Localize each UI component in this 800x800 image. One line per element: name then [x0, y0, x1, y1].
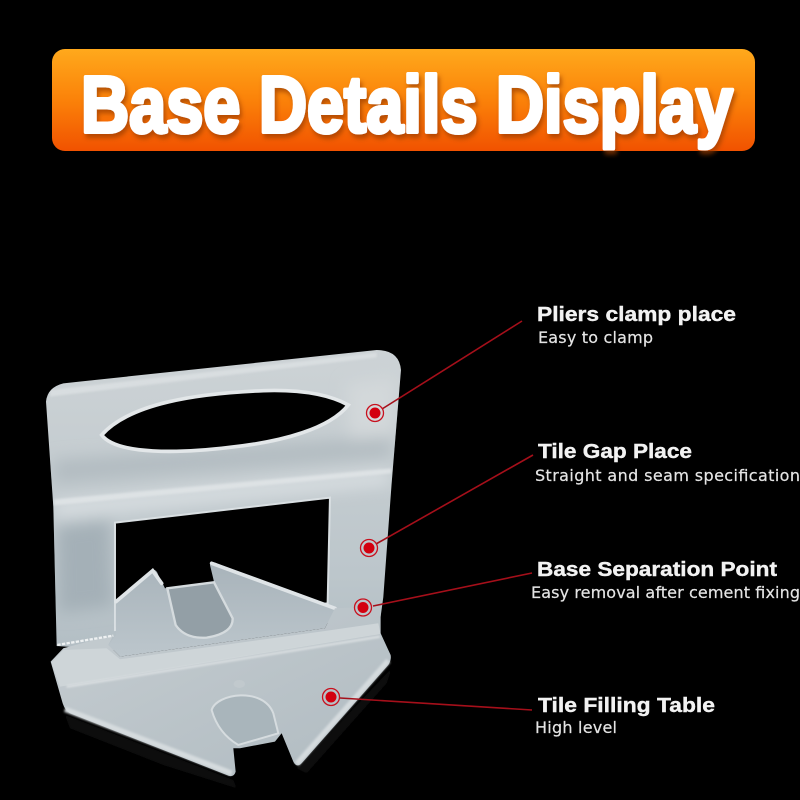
lower base	[51, 607, 391, 776]
marker	[354, 599, 372, 616]
description: Easy removal after cement fixing	[531, 583, 800, 602]
callout: pliers clamp place	[366, 304, 736, 422]
product photo: plastic tile leveling clip	[46, 350, 401, 788]
title banner	[52, 49, 755, 151]
base rim highlights	[65, 661, 388, 773]
label: Tile Filling Table	[538, 695, 715, 717]
fin notch	[167, 582, 233, 638]
description: High level	[535, 718, 617, 737]
leader line	[340, 698, 532, 710]
description: Easy to clamp	[538, 328, 653, 347]
rectangular window	[115, 498, 330, 630]
label: Pliers clamp place	[537, 304, 736, 326]
callout: tile filling table	[322, 688, 715, 737]
reflection	[65, 668, 392, 788]
fins	[108, 562, 335, 657]
marker	[360, 540, 378, 556]
callout: base separation point	[354, 559, 800, 616]
soft shading on plate	[50, 353, 397, 613]
fin edges	[116, 563, 335, 608]
callout: tile gap place	[360, 441, 800, 556]
label: Base Separation Point	[537, 559, 777, 581]
upper plate	[46, 350, 401, 650]
description: Straight and seam specification	[535, 466, 800, 485]
base slot	[212, 695, 278, 745]
leader line	[382, 321, 522, 409]
base strap band	[51, 623, 381, 687]
oval hole	[102, 390, 348, 451]
marker	[366, 404, 384, 422]
marker	[322, 688, 340, 706]
label: Tile Gap Place	[538, 441, 692, 463]
leader line	[373, 573, 532, 606]
leader line	[376, 455, 533, 544]
